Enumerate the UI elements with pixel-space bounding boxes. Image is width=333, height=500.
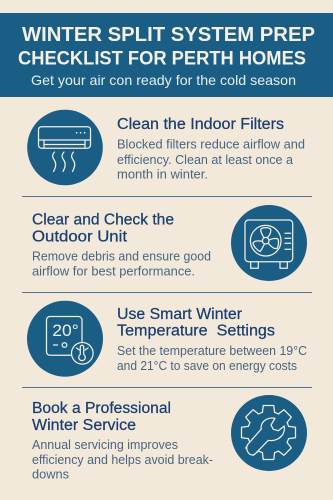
heading bbox=[117, 306, 275, 340]
icon: thermostat: 20° bbox=[52, 321, 79, 340]
header banner bbox=[0, 13, 333, 97]
panel: smart winter temperature settings bbox=[27, 301, 307, 377]
body text: Blocked filters reduce airflow and bbox=[117, 138, 305, 152]
body text: Set the temperature between 19°C bbox=[117, 344, 307, 358]
heading: Temperature Settings bbox=[117, 323, 275, 340]
heading: Clean the Indoor Filters bbox=[117, 116, 284, 133]
title: WINTER SPLIT SYSTEM PREP bbox=[22, 24, 315, 46]
heading bbox=[32, 212, 174, 245]
heading: Clear and Check the bbox=[32, 212, 174, 229]
title bbox=[18, 24, 315, 70]
icon: indoor air conditioner bbox=[27, 110, 103, 185]
subtitle: Get your air con ready for the cold season bbox=[31, 72, 296, 88]
body text bbox=[117, 138, 305, 182]
body text: downs bbox=[32, 468, 69, 482]
heading: Use Smart Winter bbox=[117, 306, 242, 323]
body text: and 21°C to save on energy costs bbox=[117, 359, 297, 373]
panel: clear and check the outdoor unit bbox=[32, 205, 307, 281]
icon: outdoor unit with fan bbox=[231, 205, 307, 281]
body text: Annual servicing improves bbox=[32, 438, 178, 452]
body text: airflow for best performance. bbox=[32, 264, 195, 278]
body text bbox=[32, 250, 211, 278]
body text: month in winter. bbox=[117, 168, 208, 182]
heading: Book a Professional bbox=[32, 400, 171, 417]
body text: efficiency and helps avoid break- bbox=[32, 453, 213, 467]
icon: gear and wrench bbox=[231, 395, 307, 471]
body text bbox=[32, 438, 213, 482]
title: CHECKLIST FOR PERTH HOMES bbox=[18, 48, 306, 70]
icon: thermostat bbox=[27, 301, 103, 377]
heading: Outdoor Unit bbox=[32, 228, 128, 245]
panel: clean the indoor filters bbox=[27, 110, 305, 185]
body text: Remove debris and ensure good bbox=[32, 250, 211, 264]
panel: book a professional winter service bbox=[32, 395, 307, 482]
body text bbox=[117, 344, 307, 373]
heading: Winter Service bbox=[32, 417, 136, 434]
body text: efficiency. Clean at least once a bbox=[117, 153, 293, 167]
heading bbox=[32, 400, 171, 434]
